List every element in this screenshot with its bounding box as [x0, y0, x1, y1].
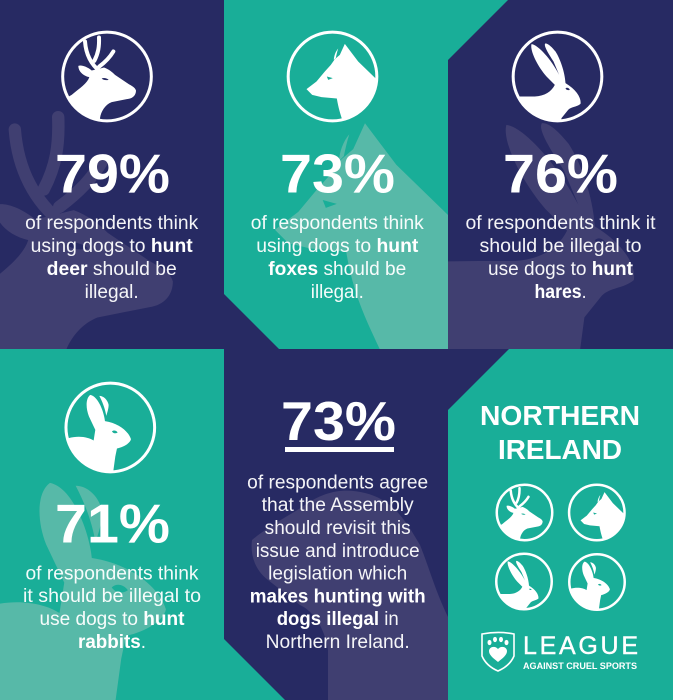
panel: deer [0, 30, 198, 349]
text: fox finding [251, 213, 424, 303]
text: deer finding [25, 213, 199, 303]
icon: rabbit [64, 382, 156, 474]
ghost dog silhouette [252, 491, 448, 700]
stat: 73%: 73% [280, 142, 395, 204]
text: rabbit finding [23, 563, 201, 653]
heading: IRELAND [498, 434, 622, 465]
heading [480, 400, 640, 465]
corner triangle: navy [448, 349, 509, 410]
tagline: AGAINST CRUEL SPORTS [523, 661, 637, 672]
text: hare finding: use dogs to hunt [488, 259, 634, 280]
icon: small deer [496, 484, 554, 542]
wordmark: LEAGUE [523, 632, 638, 660]
text: hare finding [466, 213, 656, 303]
text: assembly finding: Northern Ireland. [266, 632, 410, 653]
panel: hare [448, 0, 656, 349]
stat: 76%: 76% [503, 142, 618, 204]
panel: fox [224, 0, 448, 349]
stat: 73% underlined: 73% [281, 390, 396, 452]
icon: small rabbit [568, 553, 626, 611]
corner triangle: teal [448, 0, 508, 60]
icon: small fox [568, 484, 626, 542]
text: rabbit finding: of respondents think [26, 563, 199, 584]
panel: rabbit [0, 349, 224, 700]
text: deer finding: of respondents think [25, 213, 199, 234]
text: fox finding: illegal. [311, 282, 364, 303]
text: rabbit finding: rabbits. [78, 632, 146, 653]
text: hare finding: hares. [534, 282, 586, 303]
text: hare finding: of respondents think it [466, 213, 656, 234]
stat: 71%: 71% [55, 493, 170, 555]
text: rabbit finding: it should be illegal to [23, 586, 201, 607]
logo: League Against Cruel Sports [482, 632, 638, 672]
corner triangle: navy [224, 294, 279, 349]
text: hare finding: should be illegal to [480, 236, 642, 257]
text: rabbit finding: use dogs to hunt [40, 609, 185, 630]
ghost fox silhouette [275, 124, 448, 349]
icon: small hare [495, 552, 553, 610]
heading: NORTHERN [480, 400, 640, 431]
icon: fox [286, 30, 378, 122]
panel: Northern Ireland summary [448, 349, 673, 700]
stat: 79%: 79% [55, 142, 170, 204]
text: assembly finding: legislation which [268, 564, 407, 584]
ghost hare silhouette [448, 123, 634, 349]
icon: paw shield [482, 632, 514, 671]
ghost deer silhouette [0, 111, 173, 349]
icon: hare [512, 30, 604, 122]
text: assembly finding: makes hunting with [250, 586, 426, 608]
text: deer finding: using dogs to hunt [31, 236, 193, 257]
text: assembly finding: that the Assembly [262, 495, 414, 516]
text: fox finding: of respondents think [251, 213, 424, 234]
corner triangle: teal [224, 639, 285, 700]
text: assembly finding [247, 472, 428, 653]
text: fox finding: foxes should be [268, 259, 406, 280]
text: deer finding: illegal. [85, 282, 139, 303]
text: fox finding: using dogs to hunt [256, 236, 419, 257]
panel: assembly [224, 402, 448, 700]
text: deer finding: deer should be [47, 259, 177, 280]
text: assembly finding: of respondents agree [247, 472, 428, 493]
ghost rabbit silhouette [0, 483, 166, 700]
text: assembly finding: dogs illegal in [277, 609, 399, 630]
text: assembly finding: issue and introduce [256, 541, 420, 562]
text: assembly finding: should revisit this [265, 518, 411, 539]
icon: deer [61, 30, 153, 122]
